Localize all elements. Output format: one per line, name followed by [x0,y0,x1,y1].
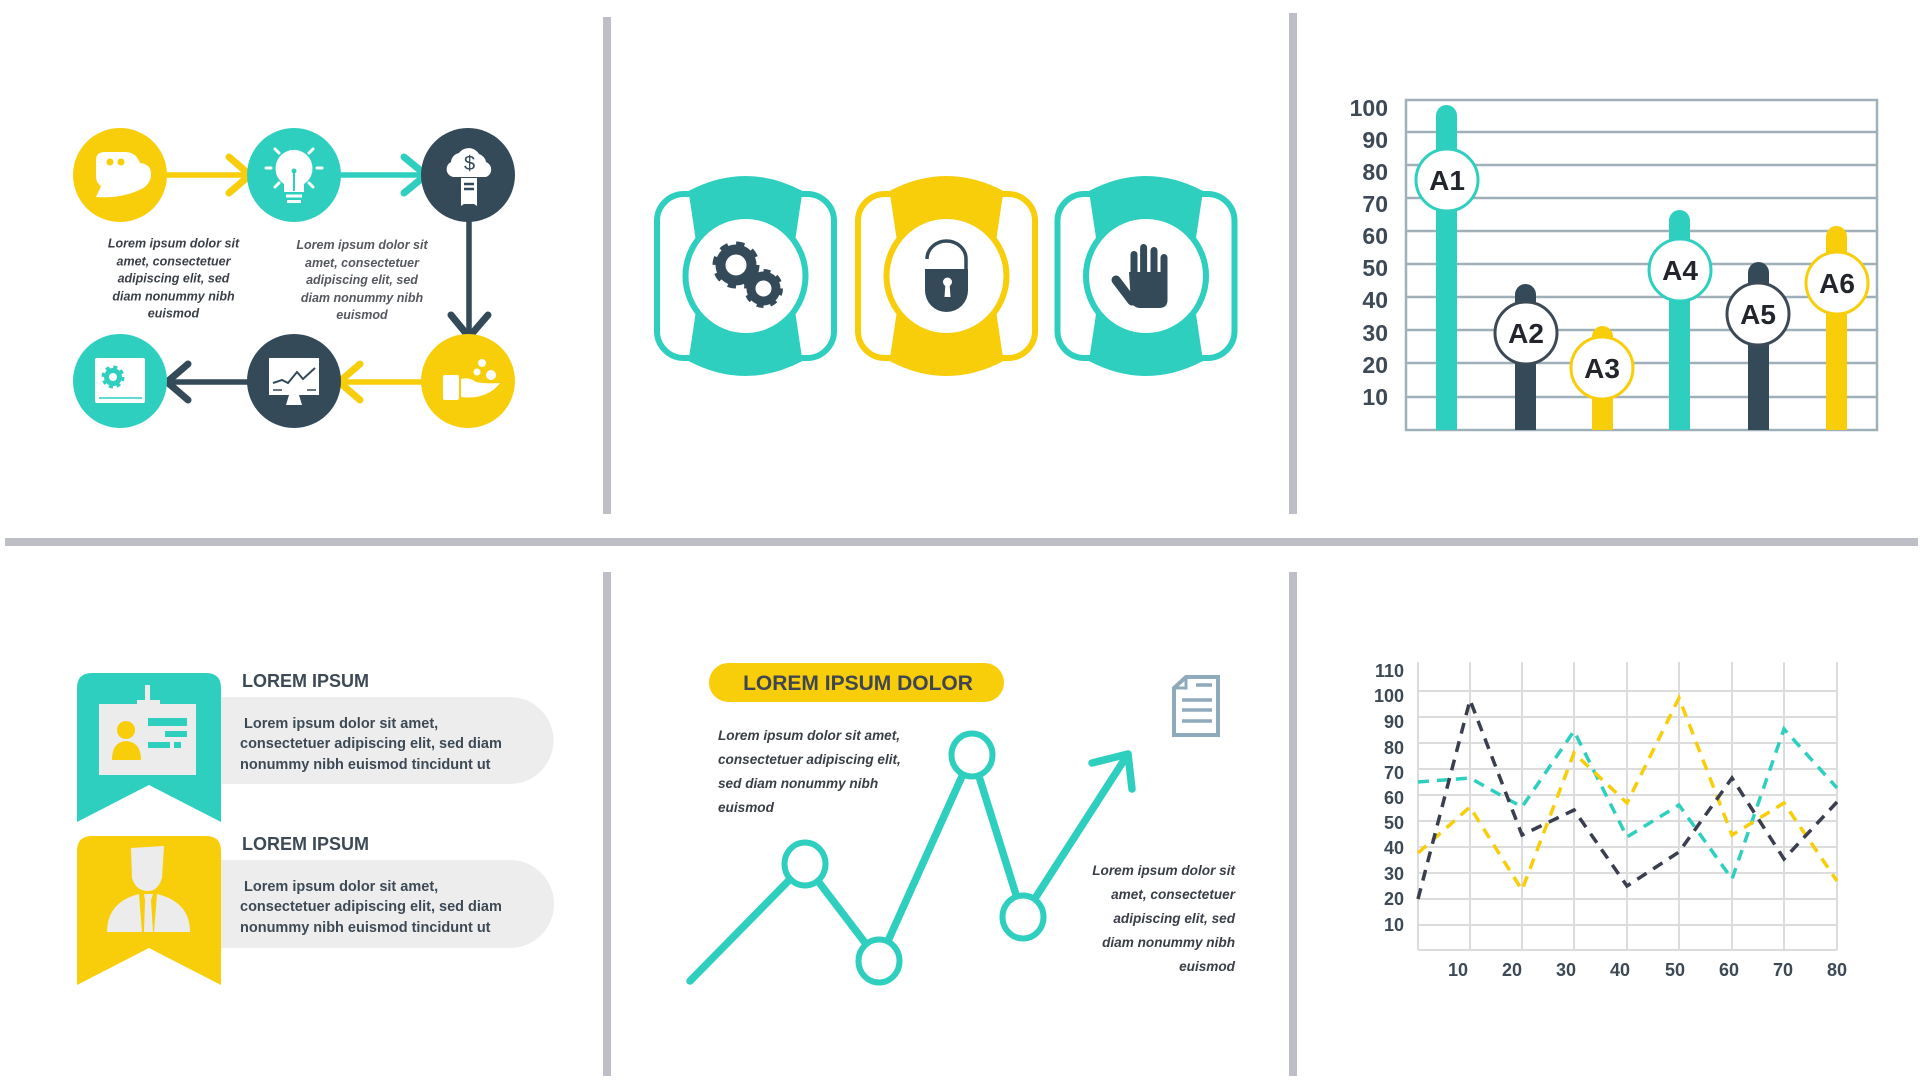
icon: hand and coins circle [421,334,515,428]
panel: bar chart [1350,95,1877,430]
axis labels: 60 [1362,223,1388,249]
icon: light bulb circle [247,128,341,222]
x axis labels: 80 [1827,960,1847,980]
panel: process flow [73,128,515,428]
arrow: monitor to safe [167,364,247,400]
arrow: chat to idea [167,157,250,193]
right text: adipiscing elit, sed [1113,911,1236,926]
title pill: LOREM IPSUM DOLOR [743,672,973,695]
y axis labels: 50 [1384,813,1404,833]
panel: profile cards [77,671,554,985]
left text [718,728,901,815]
body text 2: consectetuer adipiscing elit, sed diam [240,899,502,915]
axis labels: 50 [1362,255,1388,281]
bar A1 [1416,105,1478,430]
text pill 1 [215,697,554,784]
ribbon: id card [77,673,221,822]
text: left caption: adipiscing elit, sed [118,272,230,286]
text: left caption: amet, consectetuer [117,254,232,268]
x axis labels: 70 [1773,960,1793,980]
series: teal dashed [1418,729,1837,879]
body text 1: nonummy nibh euismod tincidunt ut [240,757,491,773]
x axis labels [1448,960,1847,980]
axis labels: 40 [1362,287,1388,313]
right text: amet, consectetuer [1111,887,1236,902]
text: right caption [296,238,428,322]
right text: Lorem ipsum dolor sit [1092,863,1235,878]
axis labels: 70 [1362,191,1388,217]
bar A6 [1806,226,1868,430]
ribbon: businessman [77,836,221,985]
y axis labels: 20 [1384,889,1404,909]
series: yellow dashed [1418,698,1837,890]
text: right caption: adipiscing elit, sed [306,273,418,287]
y axis labels: 10 [1384,915,1404,935]
left text: Lorem ipsum dolor sit amet, [718,728,900,743]
text: right caption: euismod [336,308,388,322]
y axis labels: 90 [1384,712,1404,732]
icon: document [1174,677,1218,735]
x axis labels: 40 [1610,960,1630,980]
text: left caption [108,236,240,320]
arrow: idea to cloud [341,157,426,193]
text: left caption: euismod [148,306,200,320]
series: dark dashed [1418,700,1837,899]
chart grid [1418,662,1837,950]
heading 1: LOREM IPSUM [242,671,369,691]
panel: dashed line chart [1374,661,1847,980]
arrow: hand to monitor [339,364,422,400]
arrow: cloud to hand [451,222,488,337]
x axis labels: 50 [1665,960,1685,980]
y axis labels: 30 [1384,864,1404,884]
trend line with nodes [690,734,1132,982]
y axis labels: 40 [1384,838,1404,858]
y axis labels [1374,661,1404,935]
body text 1: Lorem ipsum dolor sit amet, [244,716,438,732]
panel: line trend [690,663,1236,982]
text: right caption: amet, consectetuer [305,256,420,270]
x axis labels: 60 [1719,960,1739,980]
bar A5: A5 [1740,299,1776,330]
text pill 2 [215,860,554,948]
axis labels [1350,95,1388,410]
icon: safe circle [73,334,167,428]
text: left caption: diam nonummy nibh [112,290,235,304]
heading 2: LOREM IPSUM [242,834,369,854]
bar A2: A2 [1508,318,1544,349]
icon: monitor chart circle [247,334,341,428]
bar A4: A4 [1662,255,1698,286]
icon: hand lens [1058,176,1234,376]
y axis labels: 60 [1384,788,1404,808]
right text [1092,863,1236,974]
x axis labels: 20 [1502,960,1522,980]
text: left caption: Lorem ipsum dolor sit [108,236,240,250]
axis labels: 90 [1362,127,1388,153]
bar A1: A1 [1429,165,1465,196]
y axis labels: 70 [1384,763,1404,783]
right text: diam nonummy nibh [1102,935,1235,950]
title pill [709,663,1004,702]
body text 2: nonummy nibh euismod tincidunt ut [240,920,491,936]
right text: euismod [1179,959,1236,974]
x axis labels: 30 [1556,960,1576,980]
axis labels: 100 [1350,95,1388,121]
icon: gears lens [657,176,834,376]
bar A6: A6 [1819,268,1855,299]
text: right caption: diam nonummy nibh [301,291,423,305]
bar A5 [1727,262,1789,430]
bar A3 [1571,326,1633,430]
left text: euismod [718,800,775,815]
axis labels: 20 [1362,352,1388,378]
panel: three lens icons [657,176,1234,376]
axis labels: 80 [1362,159,1388,185]
body text 1: consectetuer adipiscing elit, sed diam [240,736,502,752]
bar A2 [1495,284,1557,430]
text: right caption: Lorem ipsum dolor sit [296,238,428,252]
body text 2: Lorem ipsum dolor sit amet, [244,879,438,895]
chart grid [1406,100,1877,430]
left text: sed diam nonummy nibh [718,776,878,791]
icon: cloud money circle: $ [464,153,475,175]
icon: chat bubble circle [73,128,167,222]
bar A3: A3 [1584,353,1620,384]
x axis labels: 10 [1448,960,1468,980]
icon: cloud money circle [421,128,515,222]
y axis labels: 110 [1375,661,1404,681]
body text 2 [240,879,502,936]
bar A4 [1649,210,1711,430]
y axis labels: 80 [1384,738,1404,758]
body text 1 [240,716,502,773]
icon: padlock lens [858,176,1035,376]
left text: consectetuer adipiscing elit, [718,752,901,767]
y axis labels: 100 [1374,686,1404,706]
axis labels: 10 [1362,384,1388,410]
axis labels: 30 [1362,320,1388,346]
